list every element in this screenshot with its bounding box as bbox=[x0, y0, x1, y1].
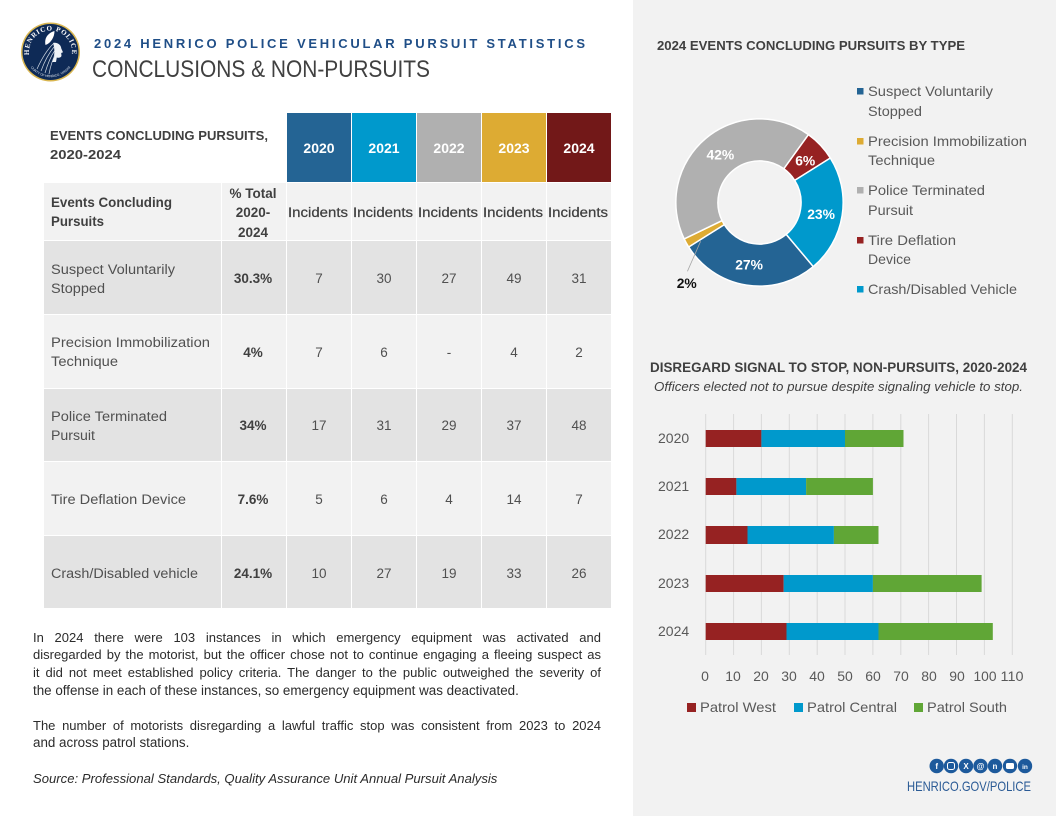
row: police terminated pursuit: 17 bbox=[311, 418, 327, 433]
row: precision immobilization technique: 4 bbox=[510, 345, 518, 360]
row: police terminated pursuit: 37 bbox=[506, 418, 522, 433]
legend: donut chart: Precision Immobilization bbox=[868, 133, 1027, 149]
row: suspect voluntarily stopped: 49 bbox=[506, 271, 522, 286]
column header row: 2024 bbox=[238, 225, 269, 240]
row: suspect voluntarily stopped: 30 bbox=[376, 271, 392, 286]
year header cells: 2021 bbox=[368, 140, 400, 156]
row: police terminated pursuit: Police Terminated bbox=[51, 409, 167, 424]
text block: narrative and source: the offense in each of these instances, so emergency equipment was deactivated. bbox=[33, 683, 519, 698]
row: crash or disabled vehicle: Crash/Disabled vehicle bbox=[51, 566, 198, 581]
slice: police terminated bbox=[676, 119, 808, 239]
row: precision immobilization technique: 7 bbox=[315, 345, 323, 360]
row: tire deflation device: 4 bbox=[445, 492, 453, 507]
legend: bar chart: Patrol South bbox=[927, 699, 1007, 715]
row: suspect voluntarily stopped: Suspect Voluntarily bbox=[51, 262, 175, 277]
row: crash or disabled vehicle: 33 bbox=[506, 566, 522, 581]
text block: narrative and source bbox=[33, 630, 601, 786]
year header cells: 2024 bbox=[563, 140, 595, 156]
title: page heading: CONCLUSIONS & NON-PURSUITS bbox=[92, 56, 430, 83]
row: tire deflation device: 7 bbox=[575, 492, 583, 507]
text block: narrative and source: In 2024 there were 103 instances in which emergency equipment was activated and bbox=[33, 630, 601, 645]
bar: 2021 bbox=[706, 478, 873, 495]
legend: donut chart: Tire Deflation bbox=[868, 232, 956, 248]
leader line and 2% label bbox=[677, 241, 701, 291]
value axis labels: 90 bbox=[949, 668, 965, 684]
category axis labels: 2024 bbox=[658, 623, 689, 639]
leader line and 2% label: 2% bbox=[677, 275, 697, 291]
slice: tire deflation bbox=[784, 135, 830, 180]
legend: bar chart bbox=[687, 699, 1007, 715]
row: police terminated pursuit: 48 bbox=[571, 418, 587, 433]
column header row: % Total bbox=[230, 186, 276, 201]
icons: social media row: @ bbox=[977, 762, 985, 771]
row: crash or disabled vehicle: 24.1% bbox=[234, 566, 272, 581]
category axis labels: 2020 bbox=[658, 430, 689, 446]
value axis labels: 70 bbox=[893, 668, 909, 684]
column header row: Incidents bbox=[288, 205, 348, 220]
bar: 2020 bbox=[706, 430, 904, 447]
bar: 2023 bbox=[706, 575, 982, 592]
bar: 2022 bbox=[706, 526, 878, 544]
row: tire deflation device: Tire Deflation Device bbox=[51, 492, 186, 507]
row: tire deflation device: 14 bbox=[506, 492, 522, 507]
row: suspect voluntarily stopped: Stopped bbox=[51, 281, 105, 296]
column header row: Pursuits bbox=[51, 214, 104, 229]
icons: social media row bbox=[930, 759, 1032, 773]
text block: narrative and source: it did not meet established policy criteria. The danger to the public outweighed the severity of bbox=[33, 665, 601, 680]
column header row: Events Concluding bbox=[51, 195, 172, 210]
column header row bbox=[44, 183, 611, 240]
value axis labels: 10 bbox=[725, 668, 741, 684]
title: report series: 2024 HENRICO POLICE VEHICULAR PURSUIT STATISTICS bbox=[94, 36, 585, 51]
donut value labels: 42% bbox=[707, 146, 734, 162]
legend: donut chart: Technique bbox=[868, 152, 935, 168]
row: precision immobilization technique: 2 bbox=[575, 345, 583, 360]
column header row: Incidents bbox=[353, 205, 413, 220]
year header cells bbox=[287, 113, 611, 182]
column header row: Incidents bbox=[418, 205, 478, 220]
text block: narrative and source: and across patrol stations. bbox=[33, 735, 189, 750]
stacked bar chart: non-pursuits by patrol station bbox=[658, 414, 1024, 684]
row: tire deflation device: 5 bbox=[315, 492, 323, 507]
value axis labels: 110 bbox=[1000, 668, 1024, 684]
slice: crash or disabled bbox=[786, 158, 843, 267]
category axis labels bbox=[658, 430, 689, 639]
donut value labels bbox=[707, 146, 835, 272]
column header row: 2020- bbox=[236, 205, 270, 220]
value axis labels: 80 bbox=[921, 668, 937, 684]
row: suspect voluntarily stopped: 7 bbox=[315, 271, 323, 286]
row: police terminated pursuit: Pursuit bbox=[51, 428, 95, 443]
row: police terminated pursuit: 29 bbox=[441, 418, 457, 433]
row: police terminated pursuit: 31 bbox=[376, 418, 392, 433]
donut value labels: 23% bbox=[807, 206, 835, 222]
panel: right sidebar background bbox=[633, 0, 1056, 816]
value axis labels: 100 bbox=[974, 668, 997, 684]
table heading: EVENTS CONCLUDING PURSUITS, bbox=[50, 128, 268, 143]
heading: donut chart: 2024 EVENTS CONCLUDING PURSUITS BY TYPE bbox=[657, 38, 965, 53]
year header cells: 2023 bbox=[498, 140, 530, 156]
row: tire deflation device: 6 bbox=[380, 492, 388, 507]
legend: donut chart: Device bbox=[868, 251, 911, 267]
row: precision immobilization technique: Precision Immobilization bbox=[51, 335, 210, 350]
row: suspect voluntarily stopped: 31 bbox=[571, 271, 587, 286]
value axis labels: 40 bbox=[809, 668, 825, 684]
row: precision immobilization technique bbox=[44, 315, 611, 388]
legend: donut chart: Pursuit bbox=[868, 202, 913, 218]
category axis labels: 2022 bbox=[658, 526, 689, 542]
category axis labels: 2023 bbox=[658, 575, 689, 591]
slice: precision immobilization bbox=[684, 221, 724, 247]
value axis labels: 30 bbox=[781, 668, 797, 684]
year header cells: 2022 bbox=[433, 140, 465, 156]
table heading bbox=[50, 128, 268, 162]
row: police terminated pursuit: 34% bbox=[239, 418, 267, 433]
value axis labels bbox=[701, 668, 1024, 684]
legend: donut chart: Crash/Disabled Vehicle bbox=[868, 281, 1017, 297]
donut value labels: 27% bbox=[735, 256, 763, 272]
slice: suspect voluntarily stopped bbox=[689, 225, 813, 286]
subheading: bar chart: Officers elected not to pursue despite signaling vehicle to stop. bbox=[654, 379, 1023, 394]
legend: bar chart: Patrol Central bbox=[807, 699, 897, 715]
row: crash or disabled vehicle: 26 bbox=[571, 566, 587, 581]
row: crash or disabled vehicle: 10 bbox=[311, 566, 327, 581]
row: suspect voluntarily stopped bbox=[44, 241, 611, 314]
icon: Henrico Police seal bbox=[21, 22, 80, 82]
donut value labels: 6% bbox=[795, 152, 815, 168]
row: precision immobilization technique: - bbox=[447, 345, 451, 360]
row: precision immobilization technique: Technique bbox=[51, 354, 118, 369]
bar: 2024 bbox=[706, 623, 993, 640]
table heading: 2020-2024 bbox=[50, 147, 122, 162]
text block: narrative and source: disregarded by the motorist, but the officer chose not to continue engaging a fleeing suspect as bbox=[33, 647, 601, 662]
text block: narrative and source: The number of motorists disregarding a lawful traffic stop was consistent from 2023 to 2024 bbox=[33, 718, 601, 733]
column header row: Incidents bbox=[483, 205, 543, 220]
legend: donut chart: Suspect Voluntarily bbox=[868, 83, 993, 99]
row: police terminated pursuit bbox=[44, 389, 611, 461]
category axis labels: 2021 bbox=[658, 478, 689, 494]
heading: bar chart: DISREGARD SIGNAL TO STOP, NON-PURSUITS, 2020-2024 bbox=[650, 360, 1027, 375]
value axis labels: 20 bbox=[753, 668, 769, 684]
column header row: Incidents bbox=[548, 205, 608, 220]
value axis labels: 50 bbox=[837, 668, 853, 684]
row: precision immobilization technique: 4% bbox=[243, 345, 263, 360]
icons: social media row: in bbox=[1022, 764, 1028, 771]
legend: donut chart bbox=[857, 83, 1027, 297]
row: crash or disabled vehicle: 27 bbox=[376, 566, 392, 581]
icon: Henrico Police seal: HENRICO POLICE bbox=[24, 26, 77, 55]
row: tire deflation device bbox=[44, 462, 611, 535]
text block: narrative and source: Source: Professional Standards, Quality Assurance Unit Annual Pursuit Analysis bbox=[33, 771, 497, 786]
icons: social media row: X bbox=[963, 762, 969, 771]
legend: bar chart: Patrol West bbox=[700, 699, 776, 715]
donut chart: events by type bbox=[676, 119, 843, 291]
row: crash or disabled vehicle: 19 bbox=[441, 566, 457, 581]
panel: events concluding pursuits table bbox=[44, 113, 611, 608]
value axis labels: 60 bbox=[865, 668, 881, 684]
row: suspect voluntarily stopped: 27 bbox=[441, 271, 457, 286]
year header cells: 2020 bbox=[303, 140, 335, 156]
icons: social media row: n bbox=[993, 762, 998, 771]
row: suspect voluntarily stopped: 30.3% bbox=[234, 271, 272, 286]
row: precision immobilization technique: 6 bbox=[380, 345, 388, 360]
legend: donut chart: Stopped bbox=[868, 103, 922, 119]
row: tire deflation device: 7.6% bbox=[238, 492, 268, 507]
row: crash or disabled vehicle bbox=[44, 536, 611, 608]
legend: donut chart: Police Terminated bbox=[868, 182, 985, 198]
value axis labels: 0 bbox=[701, 668, 709, 684]
icons: social media row: f bbox=[935, 762, 938, 771]
